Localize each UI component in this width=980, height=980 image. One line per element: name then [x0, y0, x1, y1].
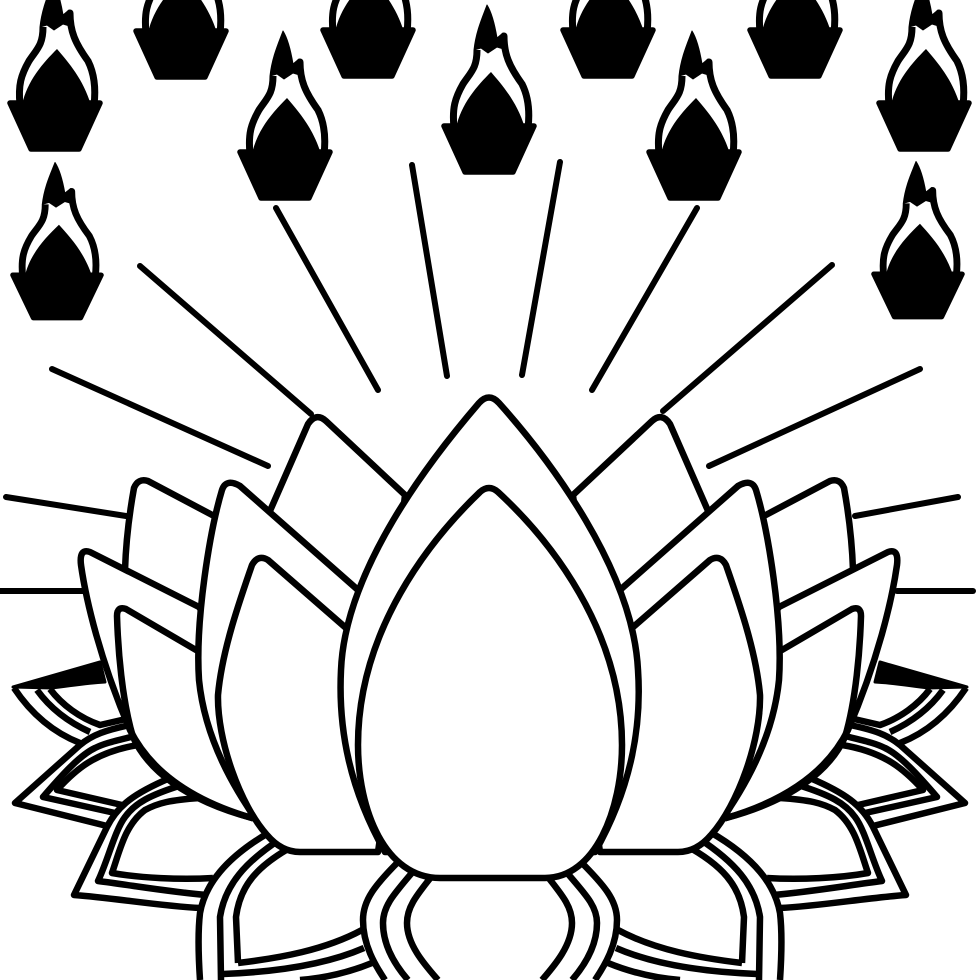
petals right	[573, 417, 897, 852]
lamp row top	[10, 0, 969, 149]
outer leaves left	[13, 662, 372, 980]
bottom centre petal	[363, 860, 617, 980]
outer leaves right	[608, 662, 967, 980]
lamp row middle	[240, 5, 739, 198]
centre inner petal	[358, 488, 622, 878]
centre outer petal	[341, 398, 639, 852]
rays	[0, 162, 973, 591]
lamp row lower	[13, 161, 962, 318]
petals left	[81, 417, 405, 852]
